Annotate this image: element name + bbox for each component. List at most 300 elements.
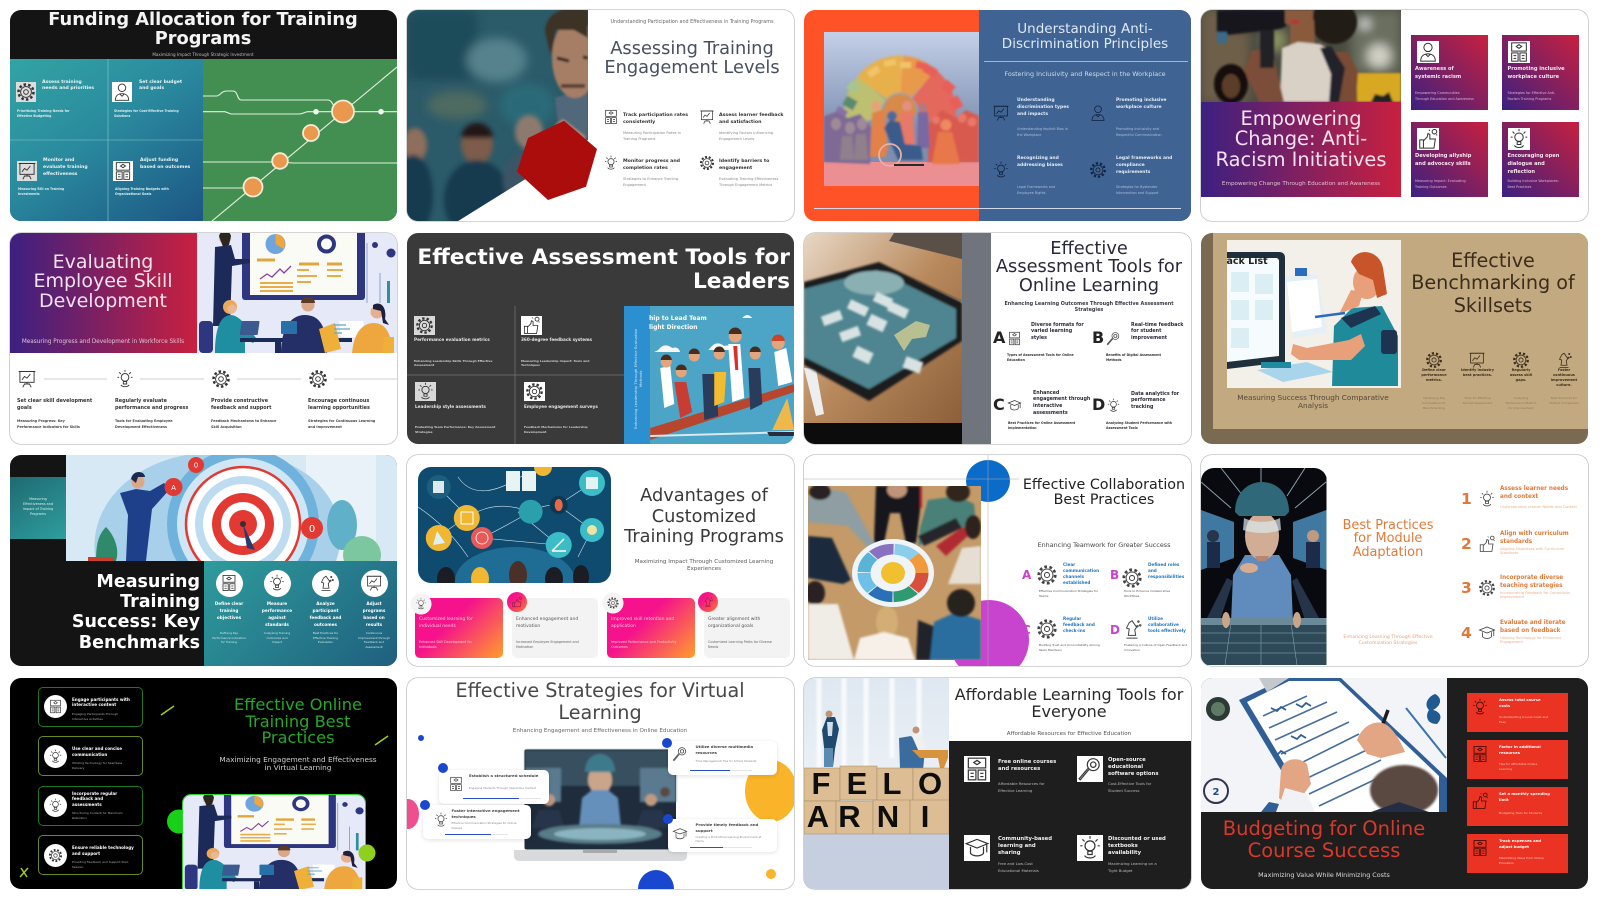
item title: established [1063, 580, 1090, 585]
item title: tracking [1131, 405, 1153, 410]
item: 4 [1461, 620, 1581, 648]
badge: card 3 [602, 592, 624, 614]
icon: layout [113, 160, 133, 180]
item title [1508, 65, 1565, 81]
item detail: Individuals [419, 645, 437, 649]
item title: Set a monthly spending [1499, 790, 1550, 796]
item title [1116, 156, 1172, 176]
icon: gear [211, 368, 231, 388]
progress bar [690, 770, 752, 771]
item detail: Engaging Participants Through [72, 712, 118, 716]
item detail: Affordable Resources for [998, 780, 1045, 786]
title: Benchmarks [79, 633, 200, 653]
item: progress [605, 156, 680, 186]
item title [1131, 322, 1183, 343]
icon: bulb [992, 161, 1010, 179]
card: spending limit [1467, 786, 1568, 826]
item title: goals [17, 404, 32, 410]
item detail [611, 640, 676, 651]
item title: interactive content [72, 702, 116, 707]
item detail [1116, 126, 1162, 138]
item title: learning and [998, 843, 1036, 849]
title: Training Best [246, 712, 350, 731]
guide lines [804, 455, 1021, 666]
panel divider lines [10, 59, 203, 221]
item title: standards [1500, 539, 1532, 545]
item detail: Performance Indicators for Skills [17, 424, 80, 428]
item detail: and Improvement [308, 424, 342, 428]
item detail [419, 640, 472, 651]
item title [1031, 322, 1084, 343]
letter: D [1092, 395, 1105, 414]
number: 2 [1461, 535, 1472, 553]
item detail: Prioritizing Training Needs for [17, 109, 70, 113]
icon: gear [1478, 578, 1496, 598]
item title: availability [1108, 850, 1141, 856]
item detail: Employee Rights [1017, 191, 1046, 195]
item title: Awareness of [1415, 66, 1454, 72]
item detail [1008, 420, 1075, 431]
block letters: O [918, 766, 942, 800]
item title: Assess training [42, 80, 82, 84]
item: 360 feedback [521, 316, 613, 368]
block letters: N [877, 798, 899, 834]
progress bar [690, 846, 752, 848]
item detail: Training Programs [623, 136, 655, 140]
item title [1499, 744, 1541, 756]
footer rule [814, 207, 1181, 210]
slide: Assessing Training Engagement Levels [407, 10, 794, 221]
title: Course Success [1248, 839, 1400, 862]
item title: performance [1421, 373, 1447, 377]
item detail: Team Members [1039, 648, 1062, 652]
slide: Effective Assessment Tools for Online Learning [804, 232, 1191, 444]
item title [43, 158, 88, 177]
item title: 360-degree feedback systems [521, 337, 592, 342]
blue accent circle [964, 458, 1012, 504]
item detail: Training Outcomes [1415, 185, 1447, 189]
item detail: Understanding Implicit Bias in [1017, 127, 1068, 131]
item detail: Building Inclusive Workplaces: [1508, 179, 1559, 183]
subtitle [1004, 300, 1174, 314]
title: Evaluating [53, 250, 153, 272]
item detail [18, 187, 64, 196]
item title [1033, 390, 1090, 418]
item: legal [1089, 154, 1179, 200]
item title: Provide constructive [211, 398, 268, 404]
card: individual needs [415, 598, 503, 658]
title: Programs [155, 28, 251, 49]
icon: thumb [1417, 128, 1439, 150]
title: Best Practices [1054, 492, 1154, 508]
card: dialogue [1502, 122, 1579, 197]
block letters [804, 766, 949, 834]
title [996, 240, 1182, 295]
item title: outcomes [314, 622, 337, 627]
item detail: Teams [1039, 594, 1048, 598]
item detail: Respectful Communication [1116, 133, 1162, 137]
backdrop scene [804, 678, 949, 888]
item detail: Session [72, 865, 83, 869]
item: feedback [700, 110, 784, 140]
item title: Monitor and [43, 158, 74, 163]
item detail: Workflows [1124, 594, 1139, 598]
icon: gear [1121, 567, 1143, 589]
card: engagement [512, 598, 598, 658]
item detail: Development Effectiveness [115, 424, 167, 428]
item title: gaps. [1516, 378, 1526, 382]
item: check-ins [1022, 616, 1107, 654]
icon: map pin [1417, 40, 1439, 62]
item title: continuous [1553, 373, 1575, 377]
item title: dialogue and [1508, 161, 1545, 167]
item title: sharing [998, 850, 1020, 856]
icon: board [17, 368, 37, 388]
illustration: presentation frame [182, 794, 366, 888]
icon: gear [524, 382, 545, 400]
item title: against [268, 615, 286, 620]
slide: Effective Benchmarking of Skillsets [1201, 232, 1588, 444]
block letters: F [812, 766, 830, 800]
card: culture [1502, 35, 1579, 110]
vertical text: Methods [638, 370, 642, 387]
item title: Promoting inclusive [1116, 98, 1166, 103]
item detail [998, 780, 1045, 794]
item title: best practices. [1463, 373, 1492, 377]
item detail [1499, 856, 1544, 866]
item: practices [1456, 350, 1498, 410]
subtitle: Maximizing Impact Through Strategic Investment [152, 52, 254, 57]
item detail: Methods [1106, 358, 1122, 362]
subtitle [1343, 635, 1433, 646]
item detail: Budgeting Tools for Students [1499, 810, 1542, 814]
card: total cost [1467, 692, 1568, 732]
item detail: Skillset Assessment [1463, 400, 1492, 404]
icon: layout [1007, 330, 1022, 346]
item detail: Effective Training [313, 636, 338, 640]
item detail: Interactive Activities [72, 716, 103, 720]
item detail [1415, 178, 1466, 190]
item: feedback [211, 368, 301, 432]
item title [1415, 152, 1471, 168]
item detail: Fostering a Culture of Open Feedback and [1124, 643, 1187, 647]
card: schedule [439, 770, 548, 804]
item title: Factor in additional [1499, 744, 1541, 748]
title: for Module [1354, 531, 1422, 546]
item detail: Building Trust and Accountability Among [1039, 643, 1100, 647]
item detail: Evaluation [318, 640, 333, 644]
badge: multimedia [662, 738, 672, 748]
item title: assess skill [1510, 373, 1532, 377]
title [48, 10, 358, 49]
icon circle [312, 570, 339, 596]
item detail: Tools for Effective [1464, 396, 1491, 400]
item detail: Impact [272, 640, 282, 644]
item title: Establish a structured schedule [469, 773, 538, 778]
illustration: laptop with virtual meeting [514, 748, 687, 862]
icon: board [1468, 350, 1486, 370]
subtitle: Enhancing Engagement and Effectiveness in Online Education [513, 728, 687, 734]
item title [1415, 65, 1461, 81]
item title: metrics. [1426, 378, 1442, 382]
item detail [72, 860, 129, 870]
item: participation [605, 110, 688, 140]
item title [72, 790, 117, 808]
title [1023, 478, 1185, 508]
illustration heading: light Direction [649, 324, 698, 331]
item detail: Strategies for Effective Anti- [1508, 91, 1555, 95]
vertical text [632, 328, 642, 428]
title [624, 486, 784, 548]
item detail [1500, 547, 1564, 556]
caption: Measuring Success Through Comparative [1237, 392, 1389, 402]
item title [1500, 619, 1566, 635]
subtitle: in Virtual Learning [265, 763, 331, 772]
item title [611, 616, 674, 630]
item title: Adjust funding [140, 158, 178, 163]
illustration label: ack List [1226, 256, 1268, 266]
photo: man and team [407, 10, 588, 221]
letter: A [1022, 568, 1031, 582]
item title: Assess total course [1499, 696, 1541, 702]
number: 1 [1461, 490, 1472, 508]
item detail [358, 631, 390, 649]
item title: Assess learner feedback [719, 113, 784, 118]
item title: Discounted or used [1108, 836, 1166, 842]
subtitle: Affordable Resources for Effective Education [1007, 731, 1131, 737]
vertical text: Enhancing Leadership Through Effective Evaluation [632, 328, 638, 428]
title [1343, 518, 1433, 559]
item detail: Time Management Tips for School Students [696, 758, 756, 762]
title: Racism Initiatives [1216, 148, 1386, 170]
decorative circles [407, 678, 794, 888]
icon: bulb [1076, 834, 1102, 860]
icon: layout [964, 756, 990, 782]
item title: Leadership style assessments [415, 404, 486, 409]
item title: training [220, 608, 238, 613]
subtitle: Maximizing Impact Through Customized Learning [635, 559, 773, 565]
item title: Adjust [366, 601, 382, 606]
icon: magnifier [1106, 330, 1121, 346]
item detail: Strategies for Continuous Learning [308, 418, 375, 422]
title [1216, 108, 1386, 170]
item title: programs [363, 608, 385, 613]
item: culture [1543, 350, 1585, 410]
title: Training [120, 592, 200, 612]
item detail [415, 425, 495, 435]
item detail: Solutions [114, 114, 130, 118]
item title [1017, 98, 1069, 117]
item title [452, 808, 520, 819]
purple accent circle [944, 595, 1034, 666]
item title: improvement [1551, 378, 1577, 382]
item title: Improved skill retention and [611, 617, 674, 622]
icon: bulb [1478, 489, 1496, 509]
icon: cap [964, 834, 990, 860]
item detail [72, 761, 122, 771]
item detail: Feedback Mechanisms for Leadership [524, 425, 588, 429]
icon: layout [1508, 40, 1530, 62]
item detail: Analyzing [1514, 396, 1528, 400]
item detail [17, 418, 80, 430]
item title: Incorporate diverse [1500, 575, 1563, 581]
item title: Utilize diverse multimedia [696, 744, 753, 749]
item detail [72, 810, 123, 820]
item: 1 [1461, 486, 1581, 514]
item title: Engage participants with [72, 696, 130, 702]
block letters: R [838, 798, 861, 834]
item detail: Strategies for Cost-Effective Training [114, 109, 179, 113]
number: 4 [1461, 624, 1472, 642]
item detail [719, 131, 773, 140]
item detail: Promoting Inclusivity and [1116, 127, 1159, 131]
item title: Set clear skill development [17, 398, 92, 404]
item title: motivation [516, 624, 540, 629]
title [955, 686, 1183, 720]
illustration: team at a presentation [197, 232, 397, 352]
item title: assessments [72, 802, 102, 807]
item detail: Benefits of Digital Assessment [1106, 352, 1161, 356]
item detail: Aligning Training Budgets with [115, 187, 169, 191]
item title: feedback and [310, 615, 341, 620]
title: Change: Anti- [1235, 127, 1367, 150]
item title: Encouraging open [1508, 153, 1559, 159]
item title: learning opportunities [308, 404, 370, 410]
item detail: Assessment [365, 645, 383, 649]
subtitle: Measuring Progress and Development in Workforce Skills [22, 338, 184, 344]
icon: chess [1555, 350, 1573, 370]
icon: magnifier [1076, 756, 1102, 782]
item detail [1422, 396, 1446, 410]
subtitle: Maximizing Value While Minimizing Costs [1258, 871, 1390, 879]
item title [1461, 368, 1494, 378]
photo: woman with visor and screens [1201, 468, 1326, 665]
item title: teaching strategies [1500, 583, 1562, 589]
strip: vertical subtitle [624, 306, 650, 444]
item title [1063, 616, 1095, 634]
card: multimedia [668, 741, 776, 774]
item: barriers [700, 156, 778, 186]
item detail: Feedback Mechanisms to Enhance [211, 418, 276, 422]
item title: communication [72, 752, 107, 757]
title [1002, 20, 1168, 52]
icon: thumb [1478, 534, 1496, 554]
item detail: Measuring Participation Rates in [623, 131, 681, 135]
item detail: Motivation [516, 645, 533, 649]
badge: engagement [420, 800, 430, 810]
divider [984, 60, 1188, 63]
title: Effective Online [234, 695, 362, 714]
item detail: Learning [1499, 767, 1512, 771]
item: 3 [1461, 575, 1581, 603]
item detail [1039, 589, 1098, 599]
item detail [1499, 715, 1548, 725]
icon: person [1089, 104, 1107, 122]
item: style assessments [415, 382, 507, 434]
item title: Identify barriers to [719, 159, 769, 164]
item title [215, 600, 243, 621]
subtitle: Empowering Change Through Education and Awareness [1222, 181, 1380, 187]
item title: Align with curriculum [1500, 531, 1569, 537]
item detail: Outcomes and [266, 636, 288, 640]
item detail [521, 358, 589, 368]
panel: principles [979, 10, 1191, 221]
item detail [516, 640, 579, 651]
title: Online Learning [1019, 274, 1159, 296]
item detail [17, 109, 70, 118]
panel: benchmarks [204, 561, 397, 666]
icon: cap [1007, 396, 1022, 414]
item title: evaluate training [43, 165, 88, 170]
connector lines [10, 372, 397, 384]
item: engage [38, 686, 143, 726]
item detail: Racism Training Programs [1508, 97, 1551, 101]
icon: board [700, 110, 714, 124]
item title: Monitor progress and [623, 159, 680, 164]
title [1223, 818, 1425, 862]
item title: participant [312, 608, 339, 613]
item title: for student [1131, 329, 1161, 334]
item title: Customized learning for [419, 617, 473, 622]
item detail: Effective Learning [998, 788, 1032, 792]
item detail [1415, 90, 1474, 102]
item detail: Feedback and [364, 640, 384, 644]
item detail: Defining Key [220, 631, 238, 635]
item title [1508, 152, 1559, 176]
item detail [696, 834, 761, 844]
item title: tools effectively [1148, 628, 1186, 633]
title [604, 38, 780, 78]
subtitle: Experiences [687, 566, 721, 572]
item detail [1463, 396, 1492, 406]
item title [1500, 485, 1568, 501]
illustration: man at a target [66, 455, 397, 561]
photo: person writing on a clipboard [1201, 678, 1447, 812]
item detail [1007, 352, 1074, 363]
item title [1108, 756, 1158, 778]
item title: Provide timely feedback and [696, 822, 758, 827]
item title: organizational goals [708, 624, 753, 629]
item: roles [1110, 562, 1188, 598]
item title: educational [1108, 764, 1143, 770]
item: technology [38, 835, 143, 875]
item detail: Investments [18, 192, 40, 196]
item title [1551, 368, 1577, 389]
item detail: Strategies [415, 430, 433, 434]
icon circle [216, 570, 242, 596]
item title [1500, 530, 1569, 546]
title [455, 680, 745, 725]
letter: B [1110, 568, 1119, 582]
item: assess training [16, 80, 94, 118]
item detail: Engagement Levels [719, 136, 754, 140]
icon: bulb [415, 382, 436, 400]
title: Understanding Anti- [1017, 20, 1153, 36]
item detail: Standards [1500, 551, 1518, 555]
item detail: Incorporating Feedback for Continuous [1500, 591, 1570, 595]
item detail [211, 418, 276, 430]
item detail [212, 631, 246, 645]
item detail [1116, 184, 1159, 196]
item: assessments [38, 786, 143, 826]
badge: feedback [663, 814, 673, 824]
item title [139, 80, 182, 91]
item detail: Effective Budgeting [17, 114, 51, 118]
card: alignment [704, 598, 790, 658]
title [72, 572, 200, 653]
item title [696, 822, 758, 833]
item: evaluate [115, 368, 205, 432]
